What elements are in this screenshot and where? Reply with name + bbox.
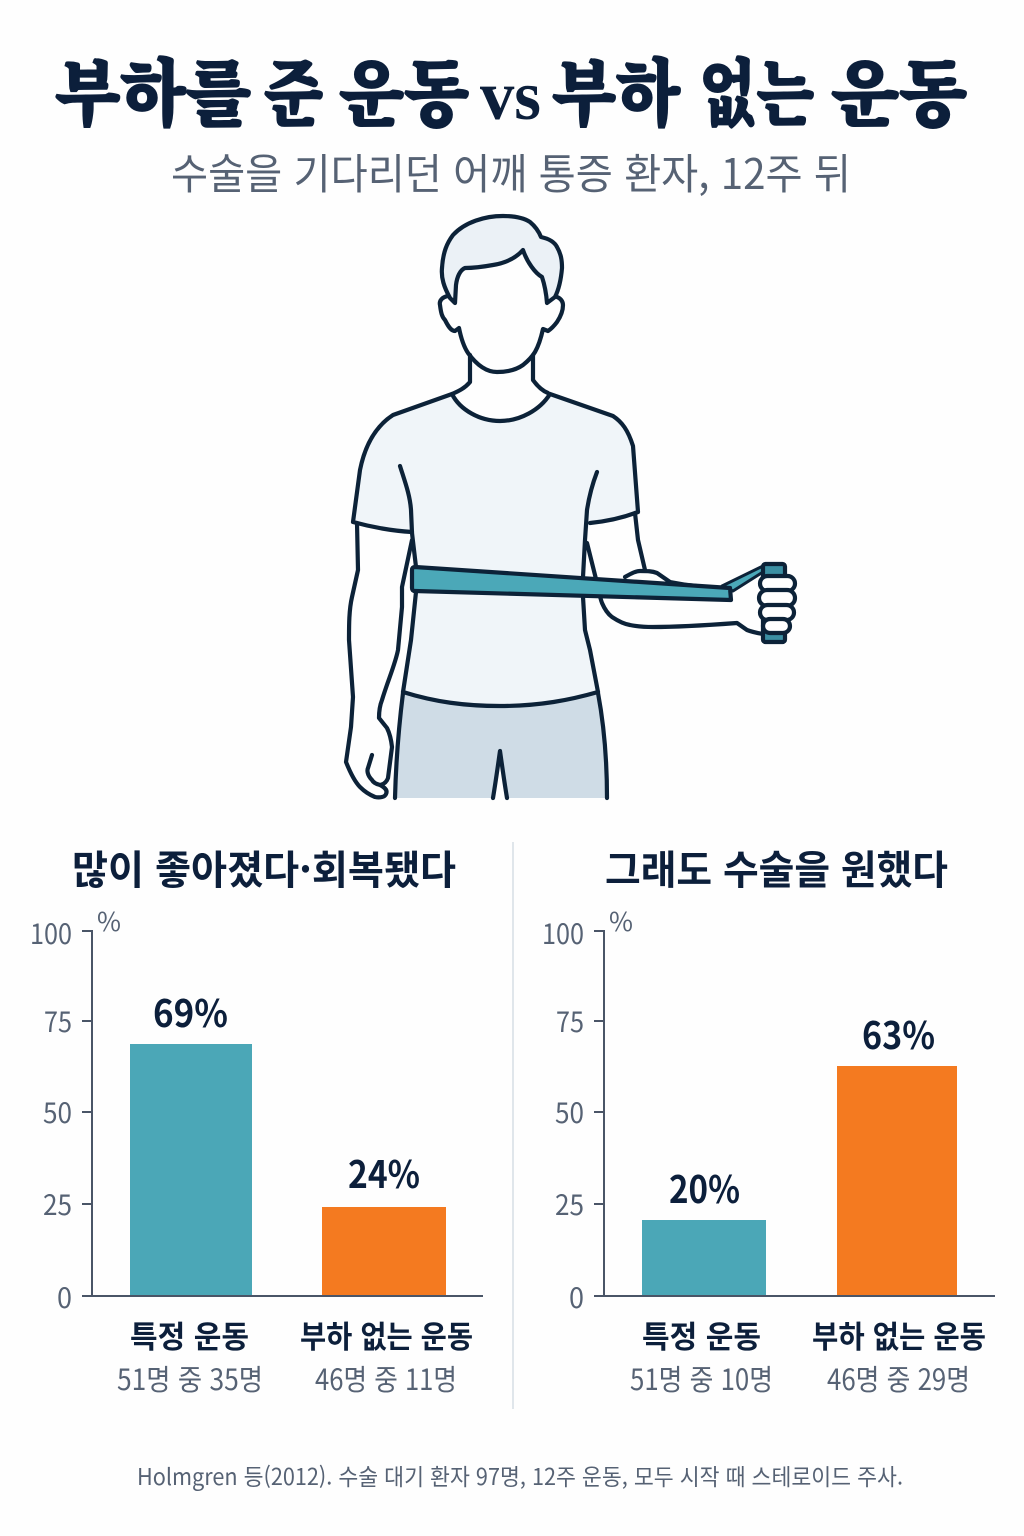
value 63%: 63% (862, 1005, 935, 1060)
resistance band (412, 567, 731, 600)
title: 부하 (552, 35, 680, 140)
category label: 특정 운동 (642, 1312, 761, 1357)
title: 준 (264, 35, 323, 140)
axis (82, 931, 483, 1296)
neck (452, 355, 548, 394)
axis labels: 50 (43, 1092, 72, 1132)
left chart panel (30, 838, 483, 1399)
bar: specific exercise 69% (130, 1044, 252, 1295)
source footnote: Holmgren 등(2012). 수술 대기 환자 97명, 12주 운동, 모두 시작 때 스테로이드 주사. (137, 1458, 903, 1492)
axis labels: 25 (43, 1184, 72, 1224)
axis labels: 75 (556, 1001, 584, 1041)
bar: no-load exercise 24% (322, 1207, 446, 1295)
bar: specific exercise 20% (642, 1220, 766, 1295)
subtitle: 수술을 기다리던 어깨 통증 환자, 12주 뒤 (171, 141, 851, 202)
right chart heading: 그래도 수술을 원했다 (605, 838, 948, 896)
right chart panel (542, 838, 995, 1399)
title (55, 35, 967, 140)
divider between charts (512, 842, 514, 1409)
percent unit: % (97, 902, 121, 939)
title: 없는 (699, 35, 814, 140)
count label: 46명 중 29명 (827, 1357, 970, 1399)
count label: 46명 중 11명 (315, 1357, 457, 1399)
hair (442, 216, 562, 303)
category label: 부하 없는 운동 (812, 1312, 986, 1357)
axis labels: 100 (30, 913, 72, 953)
count label: 51명 중 35명 (117, 1357, 263, 1399)
lowered arm (346, 523, 412, 797)
handle (763, 564, 785, 642)
category label: 부하 없는 운동 (300, 1312, 473, 1357)
axis labels: 50 (555, 1092, 584, 1132)
axis labels: 0 (569, 1277, 584, 1317)
shirt side lines (400, 466, 598, 692)
percent unit: % (609, 902, 633, 939)
title: 부하를 (55, 35, 251, 140)
category label: 특정 운동 (130, 1312, 249, 1357)
axis labels: 100 (542, 913, 584, 953)
axis labels: 75 (44, 1001, 72, 1041)
shirt hem (403, 692, 598, 706)
raised arm (587, 513, 763, 634)
trousers (395, 693, 607, 798)
face and ears (440, 296, 563, 372)
left chart heading: 많이 좋아졌다·회복됐다 (72, 838, 456, 896)
value 24%: 24% (348, 1144, 420, 1199)
title: 운동 (831, 35, 967, 140)
axis (594, 931, 995, 1296)
title: vs (480, 58, 541, 135)
shirt (353, 394, 638, 706)
value 20%: 20% (669, 1159, 740, 1214)
bar: no-load exercise 63% (837, 1066, 957, 1295)
axis labels (542, 913, 584, 1317)
illustration: man pulling resistance band (346, 216, 795, 798)
trouser outlines (395, 693, 607, 798)
resistance band tail (722, 566, 763, 591)
title: 운동 (339, 35, 469, 140)
value 69%: 69% (153, 983, 228, 1038)
axis labels (30, 913, 72, 1317)
axis labels: 0 (57, 1277, 72, 1317)
axis labels: 25 (555, 1184, 584, 1224)
fist fingers (759, 576, 795, 633)
count label: 51명 중 10명 (630, 1357, 773, 1399)
shirt outline (353, 394, 638, 532)
